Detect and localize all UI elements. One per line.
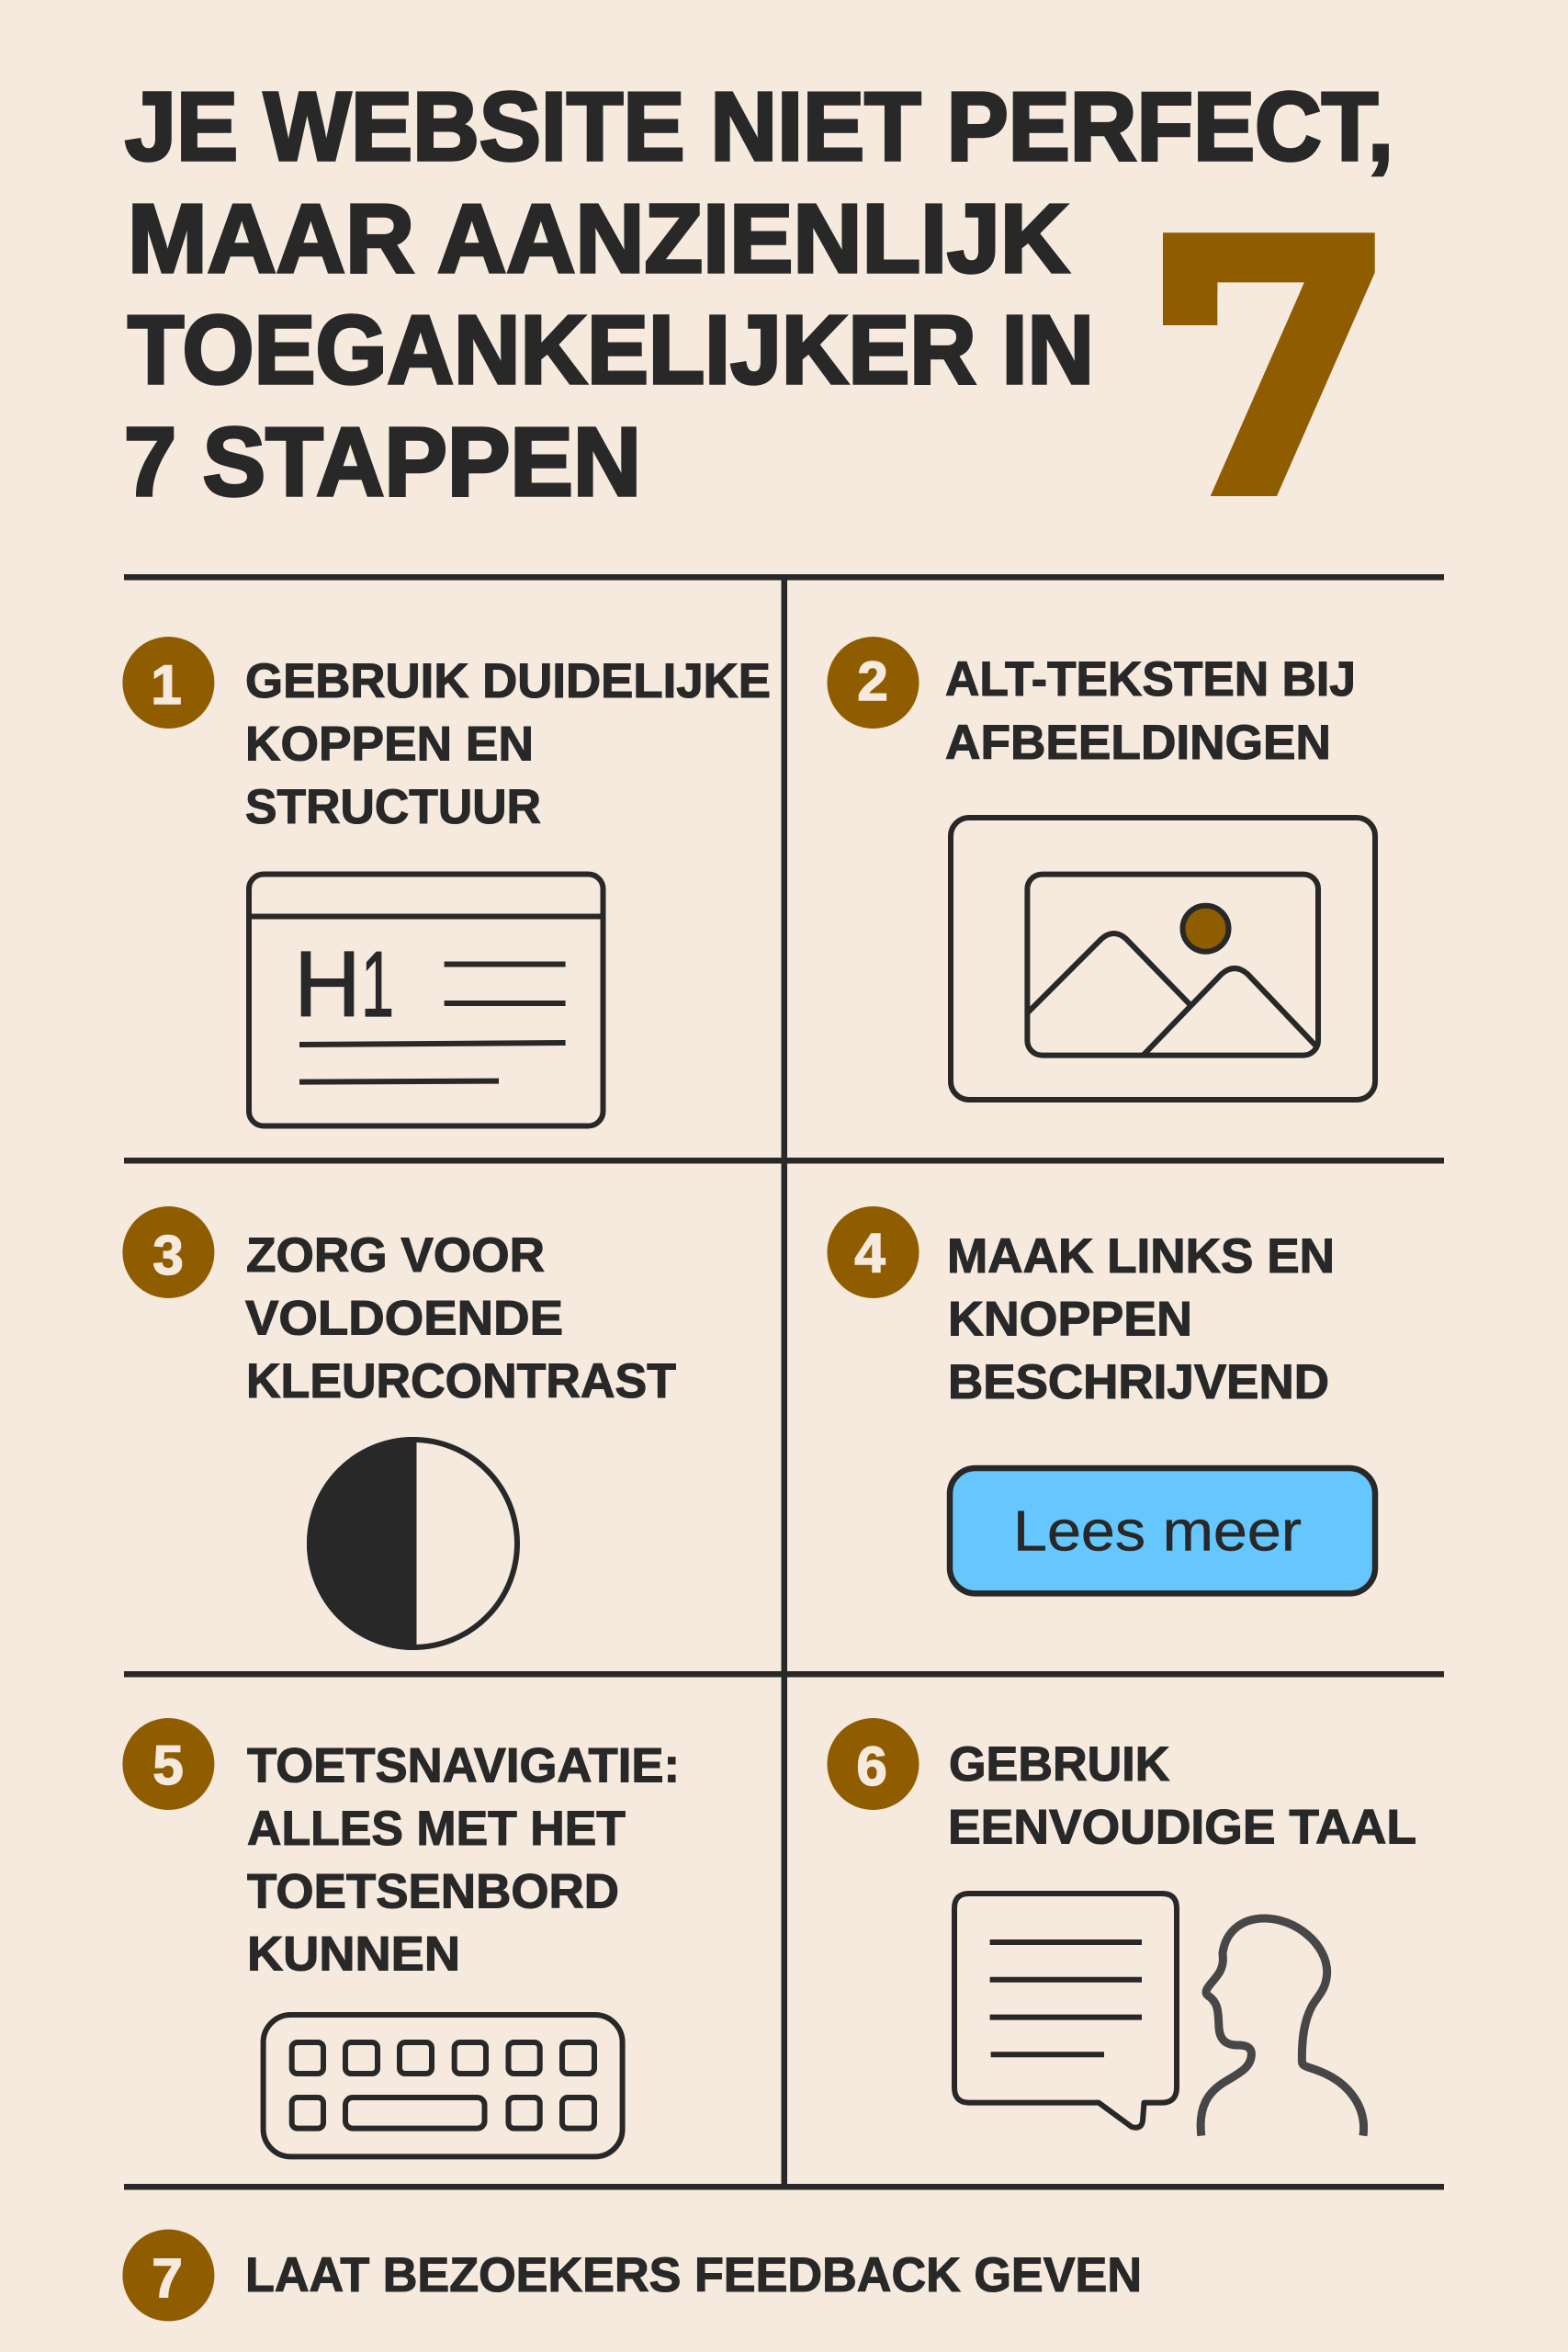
step 6 number badge <box>827 1718 919 1810</box>
step 3 heading: ZORG VOOR <box>246 1228 545 1283</box>
step 1 number badge: 1 <box>151 654 182 716</box>
step 5 heading: TOETSENBORD <box>247 1865 619 1918</box>
step 3 number badge: 3 <box>152 1225 184 1286</box>
icon: image in frame <box>951 818 1375 1100</box>
button: Lees meer <box>950 1468 1375 1593</box>
icon: browser window with H1: 1 <box>361 933 394 1036</box>
step 3 heading: VOLDOENDE <box>245 1292 563 1346</box>
step 6 heading: GEBRUIK <box>949 1737 1169 1792</box>
title: TOEGANKELIJKER IN <box>128 296 1094 404</box>
step 4 number badge: 4 <box>854 1222 886 1284</box>
icon: browser window with H1 <box>249 875 603 1126</box>
panel: step 6 <box>827 1718 1416 2136</box>
step 6 heading <box>948 1737 1416 1855</box>
panel: step 7 <box>122 2229 1142 2321</box>
panel: step 4 <box>827 1206 1375 1593</box>
step 5 number badge <box>122 1718 214 1810</box>
large numeral 7: 7 <box>1159 182 1389 557</box>
step 3 number badge <box>122 1206 214 1298</box>
step 2 heading: AFBEELDINGEN <box>945 716 1331 770</box>
step 4 number badge <box>827 1206 919 1298</box>
icon: keyboard <box>264 2015 623 2156</box>
step 2 heading <box>945 652 1356 770</box>
step 1 number badge <box>122 637 214 729</box>
panel: step 3 <box>122 1206 676 1650</box>
step 6 number badge: 6 <box>856 1736 887 1797</box>
step 5 heading <box>247 1739 680 1981</box>
step 1 heading <box>245 654 771 834</box>
title: 7 STAPPEN <box>124 408 641 516</box>
step 2 number badge: 2 <box>857 650 888 712</box>
icon: half-filled contrast circle <box>307 1437 517 1650</box>
step 1 heading: KOPPEN EN <box>245 717 534 772</box>
panel: step 2 <box>827 637 1375 1100</box>
step 3 heading <box>245 1228 676 1408</box>
step 1 heading: GEBRUIK DUIDELIJKE <box>245 654 771 708</box>
step 5 heading: ALLES MET HET <box>247 1802 626 1856</box>
title: MAAR AANZIENLIJK <box>128 185 1069 293</box>
panel: step 5 <box>122 1718 680 2156</box>
title: JE WEBSITE NIET PERFECT, <box>125 73 1393 181</box>
step 7 number badge: 7 <box>152 2247 183 2309</box>
step 4 heading: MAAK LINKS EN <box>947 1229 1335 1283</box>
step 3 heading: KLEURCONTRAST <box>246 1354 676 1408</box>
step 6 heading: EENVOUDIGE TAAL <box>948 1801 1416 1855</box>
panel: step 1 <box>122 637 771 1126</box>
step 2 heading: ALT-TEKSTEN BIJ <box>945 652 1356 707</box>
step 4 heading: KNOPPEN <box>948 1293 1192 1347</box>
icon: speech bubble <box>954 1894 1177 2128</box>
title <box>124 73 1393 516</box>
step 4 heading: BESCHRIJVEND <box>948 1355 1329 1409</box>
icon: person silhouette <box>1201 1918 1364 2136</box>
icon: browser window with H1: H <box>294 933 361 1036</box>
grid lines <box>124 574 1444 2190</box>
step 5 heading: TOETSNAVIGATIE: <box>247 1739 680 1793</box>
step 1 heading: STRUCTUUR <box>245 780 541 834</box>
step 7 heading: LAAT BEZOEKERS FEEDBACK GEVEN <box>245 2248 1142 2302</box>
step 4 heading <box>947 1229 1335 1409</box>
step 5 number badge: 5 <box>152 1735 184 1796</box>
step 2 number badge <box>827 637 919 729</box>
button: Lees meer: Lees meer <box>1013 1500 1302 1564</box>
step 7 number badge <box>122 2229 214 2321</box>
step 5 heading: KUNNEN <box>247 1927 460 1981</box>
